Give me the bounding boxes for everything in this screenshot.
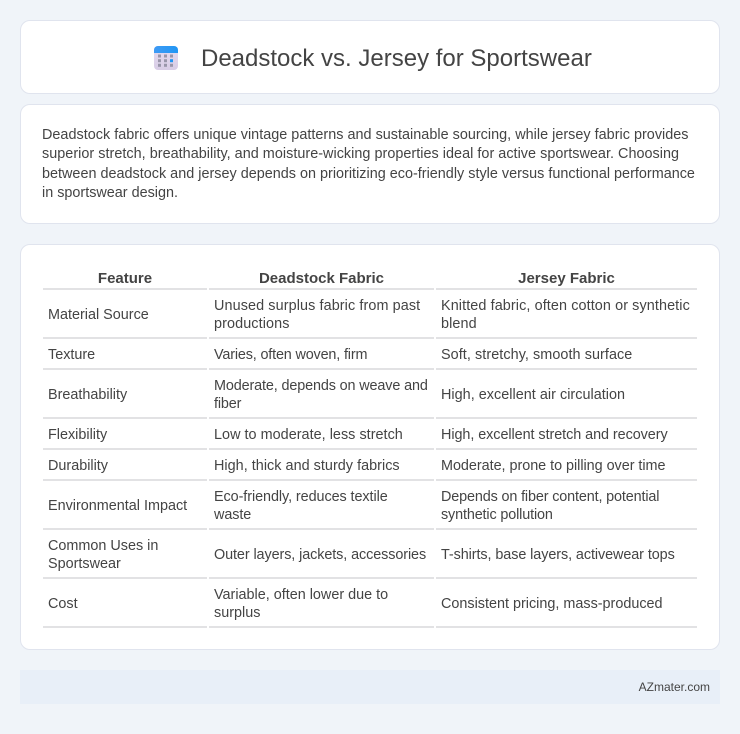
row: durability: Durability xyxy=(48,458,108,474)
table header xyxy=(43,270,697,290)
row: durability: Moderate, prone to pilling over time xyxy=(441,458,666,474)
row: breathability: High, excellent air circulation xyxy=(441,387,625,403)
row: material source xyxy=(43,298,697,339)
table header: Feature xyxy=(98,270,152,287)
row: cost xyxy=(43,587,697,628)
row: environmental impact: Eco-friendly, reduces textile xyxy=(214,489,388,505)
row: common uses: T-shirts, base layers, activewear tops xyxy=(441,547,675,563)
summary text xyxy=(42,127,695,201)
row: breathability: Moderate, depends on weave and xyxy=(214,378,428,394)
footer bar xyxy=(20,670,720,704)
row: common uses: Sportswear xyxy=(48,556,121,572)
table header: Jersey Fabric xyxy=(518,270,615,287)
footer credit: AZmater.com xyxy=(639,680,710,694)
row: cost: Variable, often lower due to xyxy=(214,587,388,603)
header panel xyxy=(20,20,720,94)
row: cost: surplus xyxy=(214,605,260,621)
row: breathability: fiber xyxy=(214,396,241,412)
row: durability: High, thick and sturdy fabrics xyxy=(214,458,400,474)
row: material source: productions xyxy=(214,316,290,332)
row: environmental impact: waste xyxy=(214,507,251,523)
row: common uses: Common Uses in xyxy=(48,538,158,554)
row: environmental impact: Environmental Impact xyxy=(48,498,187,514)
row: flexibility xyxy=(43,427,697,450)
title: Deadstock vs. Jersey for Sportswear xyxy=(201,45,592,72)
row: environmental impact xyxy=(43,489,697,530)
row: cost: Cost xyxy=(48,596,78,612)
summary text: superior stretch, breathability, and moisture-wicking properties ideal for active sportswear. Choosing xyxy=(42,146,679,162)
summary text: Deadstock fabric offers unique vintage patterns and sustainable sourcing, while jersey fabric provides xyxy=(42,127,689,143)
row: durability xyxy=(43,458,697,481)
row: flexibility: Low to moderate, less stretch xyxy=(214,427,403,443)
row: material source: Unused surplus fabric from past xyxy=(214,298,420,314)
row: common uses xyxy=(43,538,697,579)
row: environmental impact: Depends on fiber content, potential xyxy=(441,489,659,505)
row: breathability: Breathability xyxy=(48,387,127,403)
row: cost: Consistent pricing, mass-produced xyxy=(441,596,663,612)
row: material source: Knitted fabric, often cotton or synthetic xyxy=(441,298,690,314)
summary panel xyxy=(20,104,720,224)
row: flexibility: High, excellent stretch and recovery xyxy=(441,427,668,443)
row: material source: blend xyxy=(441,316,477,332)
row: texture: Texture xyxy=(48,347,95,363)
row: environmental impact: synthetic pollution xyxy=(441,507,553,523)
row: common uses: Outer layers, jackets, accessories xyxy=(214,547,426,563)
comparison table xyxy=(43,270,697,628)
summary text: between deadstock and jersey depends on prioritizing eco-friendly style versus functional performance xyxy=(42,166,695,182)
table panel xyxy=(20,244,720,650)
icon: calendar xyxy=(154,46,178,70)
row: texture: Varies, often woven, firm xyxy=(214,347,367,363)
row: texture xyxy=(43,347,697,370)
row: flexibility: Flexibility xyxy=(48,427,107,443)
table header: Deadstock Fabric xyxy=(259,270,384,287)
row: texture: Soft, stretchy, smooth surface xyxy=(441,347,632,363)
row: breathability xyxy=(43,378,697,419)
row: material source: Material Source xyxy=(48,307,149,323)
summary text: in sportswear design. xyxy=(42,185,178,201)
